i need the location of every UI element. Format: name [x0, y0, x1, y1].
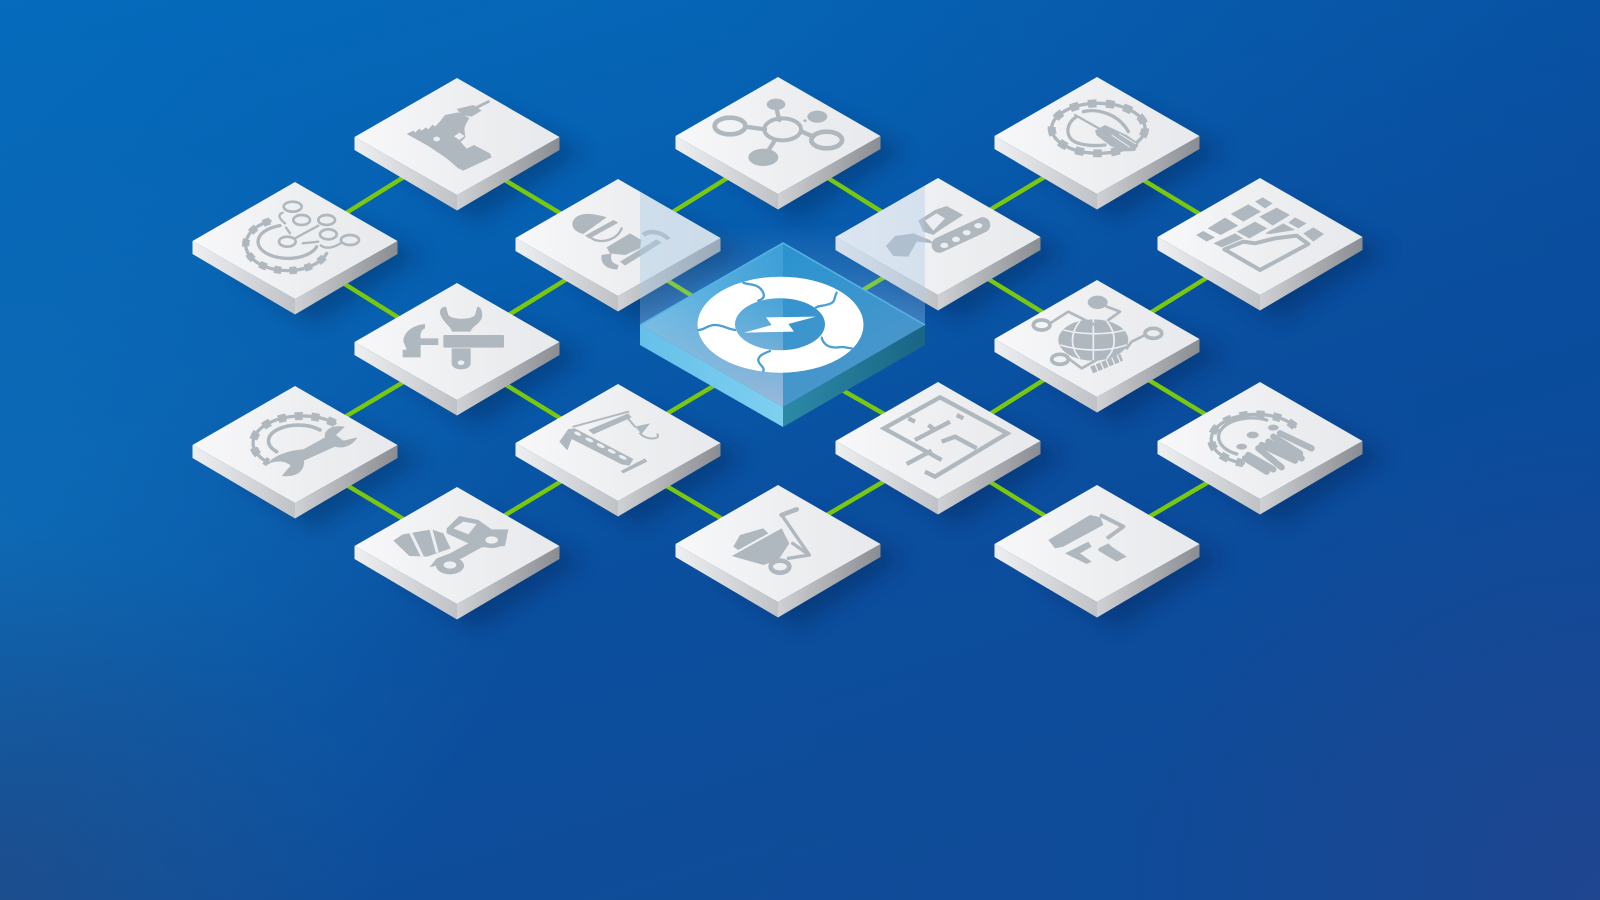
icon: safety helmet worker	[572, 214, 671, 269]
tile: wheelbarrow	[676, 485, 880, 618]
icon: globe circuit	[1033, 296, 1162, 370]
tile: people gear	[1158, 382, 1362, 514]
green connector lines	[335, 172, 1217, 523]
tile: paint roller	[994, 485, 1200, 618]
icon: people gear	[1211, 414, 1312, 472]
icon: excavator	[886, 206, 983, 257]
tile shadows	[235, 106, 1388, 630]
icon: wheelbarrow	[732, 509, 809, 573]
icon: network nodes	[715, 99, 842, 166]
tile: excavator	[836, 178, 1040, 310]
icon: concrete mixer truck	[393, 516, 508, 574]
icon: puzzle ring with lightning bolt	[697, 277, 864, 373]
icon: screwdriver gear	[1052, 103, 1145, 153]
icon: hammer and wrench	[403, 307, 504, 369]
tile: concrete mixer truck	[354, 487, 560, 620]
glass tint over helmet tile	[640, 192, 720, 298]
hub: central glass tile	[640, 243, 925, 427]
icon: circuit gear	[246, 202, 359, 271]
tile: wrench gear	[192, 386, 398, 518]
icon: floor plan	[884, 397, 1007, 477]
tile: bricks and folder	[1158, 178, 1362, 310]
icon: wrench gear	[253, 416, 357, 476]
tile: globe circuit	[994, 280, 1200, 412]
tile: crane	[516, 384, 720, 516]
tile: circuit gear	[192, 182, 398, 314]
glass tint over excavator tile	[836, 186, 925, 302]
icon: paint roller	[1048, 515, 1127, 564]
icon: bricks and folder	[1196, 197, 1324, 270]
glass wall behind hub	[640, 225, 925, 326]
tile: hammer and wrench	[354, 283, 560, 416]
icon: drill	[407, 102, 492, 171]
tile: screwdriver gear	[994, 77, 1200, 210]
icon: crane	[559, 412, 658, 473]
tile: network nodes	[676, 77, 880, 210]
tile: drill	[354, 78, 560, 210]
tile: safety helmet worker	[516, 179, 720, 312]
tile: floor plan	[836, 382, 1040, 514]
